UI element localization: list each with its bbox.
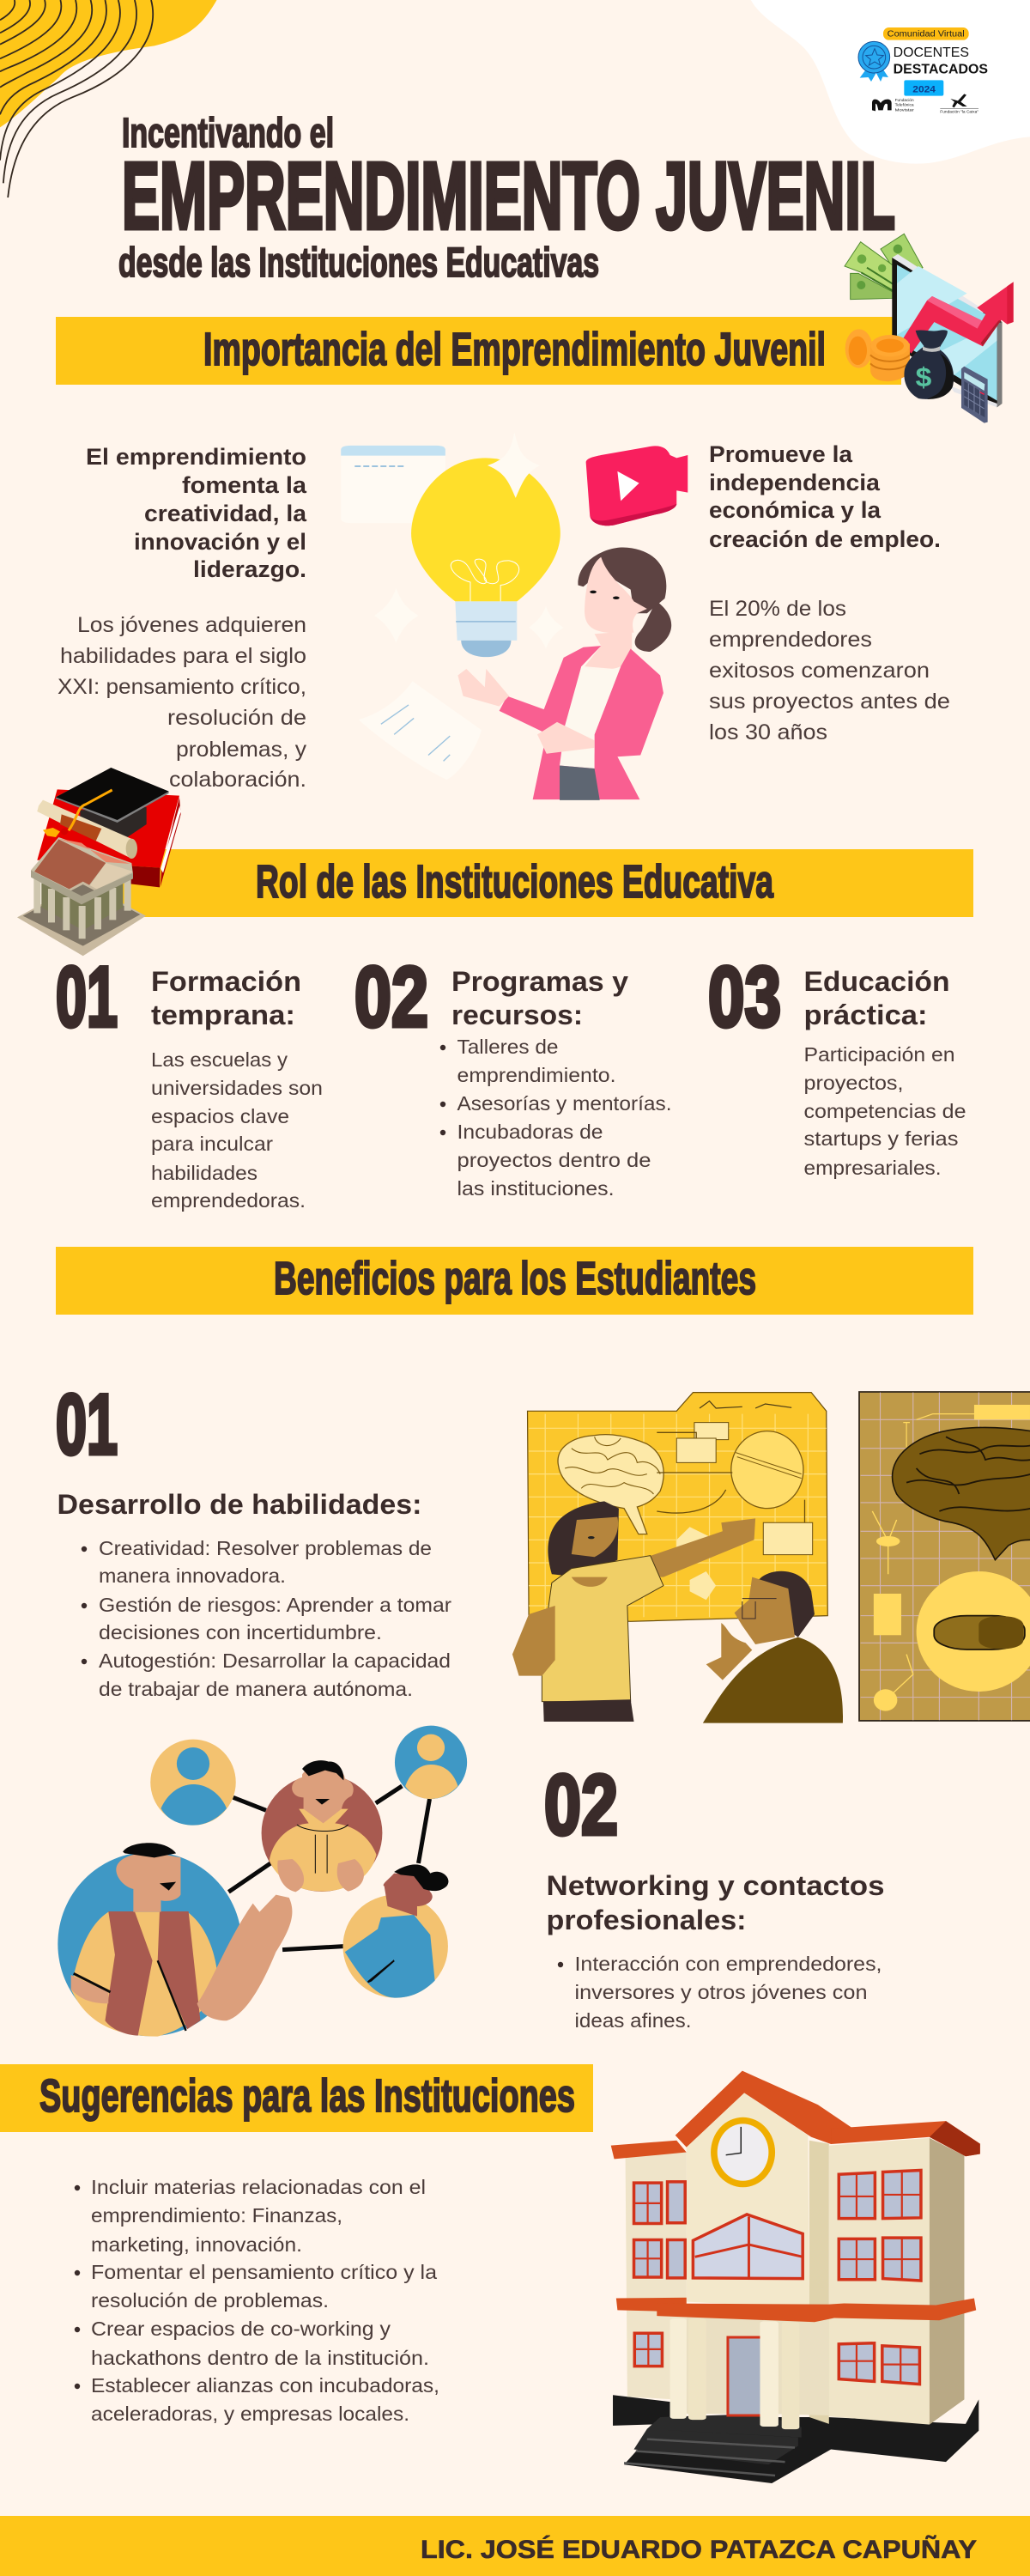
numbered column 01: espacios clave xyxy=(151,1105,289,1127)
suggestions list: Incluir materias relacionadas con el xyxy=(91,2176,426,2198)
panel: importancia left text: fomenta la xyxy=(182,472,307,498)
numbered column 01: emprendedoras. xyxy=(151,1189,306,1212)
suggestions list: Crear espacios de co-working y xyxy=(91,2318,391,2340)
suggestions list: resolución de problemas. xyxy=(91,2289,329,2312)
panel: importancia left text: resolución de xyxy=(167,706,306,730)
numbered column 01: universidades son xyxy=(151,1077,323,1099)
illustration: people at yellow board with brain and pill xyxy=(512,1392,1030,1723)
benefit 01 text: Gestión de riesgos: Aprender a tomar xyxy=(99,1594,451,1616)
section bar: Rol: Rol de las Instituciones Educativa xyxy=(256,856,774,908)
decorative blob: yellow top left with wavy lines xyxy=(0,0,217,197)
panel: importancia left text: problemas, y xyxy=(176,738,307,762)
panel: importancia left text: innovación y el xyxy=(134,529,306,555)
numbered column 03: práctica: xyxy=(803,999,927,1030)
icon: money, chart screen, coins, bag, calculator: $ xyxy=(916,361,932,392)
benefit 02 text: Networking y contactos xyxy=(546,1870,884,1901)
suggestions list: emprendimiento: Finanzas, xyxy=(91,2204,342,2227)
benefit 01 text: Creatividad: Resolver problemas de xyxy=(99,1537,432,1559)
badge: Docentes Destacados 2024: Fundación xyxy=(895,98,914,102)
section bar: Importancia xyxy=(56,317,901,385)
numbered column 03: 03 xyxy=(708,949,781,1044)
badge: Docentes Destacados 2024: 2024 xyxy=(912,84,936,94)
benefit 01 text: Autogestión: Desarrollar la capacidad xyxy=(99,1649,451,1672)
numbered column 02: Incubadoras de xyxy=(457,1121,603,1143)
benefit 01 text: manera innovadora. xyxy=(99,1564,286,1587)
panel: importancia left text xyxy=(58,444,307,792)
panel: importancia left text: liderazgo. xyxy=(193,556,306,582)
benefit 01 text xyxy=(56,1376,451,1700)
numbered column 03: competencias de xyxy=(803,1100,966,1122)
numbered column 01: temprana: xyxy=(151,999,295,1030)
section bar: Rol xyxy=(120,849,973,917)
panel: importancia right text: los 30 años xyxy=(709,720,827,744)
icon: graduation cap, book and temple xyxy=(17,768,181,956)
numbered column 01: 01 xyxy=(56,949,118,1044)
benefit 02 text: inversores y otros jóvenes con xyxy=(575,1981,867,2003)
suggestions list: hackathons dentro de la institución. xyxy=(91,2347,429,2369)
badge: Docentes Destacados 2024: Telefónica xyxy=(895,103,914,107)
panel: importancia right text: Promueve la xyxy=(709,441,853,467)
panel: importancia left text: XXI: pensamiento crítico, xyxy=(58,675,306,699)
suggestions list: aceleradoras, y empresas locales. xyxy=(91,2403,409,2425)
panel: importancia right text: exitosos comenzaron xyxy=(709,659,930,683)
icon: money, chart screen, coins, bag, calculator xyxy=(845,234,1014,423)
numbered column 03 xyxy=(708,949,966,1179)
badge: Docentes Destacados 2024: Comunidad Virtual xyxy=(888,30,965,39)
badge: Docentes Destacados 2024: Movistar xyxy=(895,108,914,112)
footer bar with author: LIC. JOSÉ EDUARDO PATAZCA CAPUÑAY xyxy=(421,2535,977,2564)
numbered column 02: Asesorías y mentorías. xyxy=(457,1092,671,1115)
numbered column 03: empresariales. xyxy=(803,1157,941,1179)
panel: importancia right text: emprendedores xyxy=(709,628,872,652)
illustration: school building xyxy=(611,2071,980,2483)
numbered column 02: emprendimiento. xyxy=(457,1064,616,1086)
suggestions list: Fomentar el pensamiento crítico y la xyxy=(91,2261,438,2283)
benefit 01 text: 01 xyxy=(56,1376,118,1472)
numbered column 01 xyxy=(56,949,323,1212)
title: Incentivando el xyxy=(122,111,334,156)
suggestions list: marketing, innovación. xyxy=(91,2233,302,2256)
numbered column 01: Formación xyxy=(151,966,301,997)
badge: Docentes Destacados 2024: DESTACADOS xyxy=(894,63,988,77)
panel: importancia left text: habilidades para el siglo xyxy=(60,644,306,668)
numbered column 02: Talleres de xyxy=(457,1036,558,1058)
benefit 02 text: 02 xyxy=(544,1757,618,1852)
panel: importancia left text: El emprendimiento xyxy=(86,444,306,470)
white blob top right xyxy=(751,0,1030,164)
panel: importancia left text: creatividad, la xyxy=(144,501,307,526)
panel: importancia right text: creación de empleo. xyxy=(709,526,941,552)
numbered column 02: 02 xyxy=(354,949,428,1044)
numbered column 02 xyxy=(354,949,671,1200)
numbered column 02: las instituciones. xyxy=(457,1177,615,1200)
benefit 02 text: profesionales: xyxy=(546,1905,747,1935)
numbered column 03: Participación en xyxy=(803,1043,954,1066)
numbered column 01: para inculcar xyxy=(151,1133,273,1155)
badge: Docentes Destacados 2024: DOCENTES xyxy=(894,46,969,60)
badge: Docentes Destacados 2024 xyxy=(858,27,988,114)
section bar: Sugerencias: Sugerencias para las Instituciones xyxy=(39,2070,575,2122)
numbered column 03: startups y ferias xyxy=(803,1127,958,1150)
panel: importancia right text: El 20% de los xyxy=(709,597,846,621)
panel: importancia left text: Los jóvenes adquieren xyxy=(77,613,306,637)
benefit 01 text: de trabajar de manera autónoma. xyxy=(99,1678,413,1700)
title xyxy=(118,111,895,286)
panel: importancia right text: sus proyectos antes de xyxy=(709,690,950,714)
numbered column 03: proyectos, xyxy=(803,1072,903,1094)
benefit 02 text: ideas afines. xyxy=(575,2009,692,2032)
numbered column 02: Programas y xyxy=(451,966,628,997)
panel: importancia left text: colaboración. xyxy=(169,768,306,792)
benefit 02 text xyxy=(544,1757,884,2032)
section bar: Beneficios: Beneficios para los Estudiantes xyxy=(274,1253,756,1304)
panel: importancia right text xyxy=(709,441,950,744)
illustration: professional network of people xyxy=(58,1726,467,2037)
badge: Docentes Destacados 2024: Fundación "la Caixa" xyxy=(940,110,978,114)
numbered column 02: proyectos dentro de xyxy=(457,1149,651,1171)
numbered column 03: Educación xyxy=(803,966,949,997)
panel: importancia right text: independencia xyxy=(709,470,881,495)
numbered column 01: habilidades xyxy=(151,1162,258,1184)
benefit 01 text: Desarrollo de habilidades: xyxy=(57,1489,422,1520)
illustration: woman with lightbulb xyxy=(341,432,688,800)
title: desde las Instituciones Educativas xyxy=(118,240,599,286)
suggestions list: Establecer alianzas con incubadoras, xyxy=(91,2374,439,2397)
numbered column 02: recursos: xyxy=(451,999,583,1030)
suggestions list xyxy=(75,2176,439,2425)
section bar: Sugerencias xyxy=(0,2064,593,2132)
numbered column 01: Las escuelas y xyxy=(151,1048,288,1071)
section bar: Beneficios xyxy=(56,1247,973,1315)
footer bar with author xyxy=(0,2516,1030,2576)
panel: importancia right text: económica y la xyxy=(709,497,882,523)
benefit 02 text: Interacción con emprendedores, xyxy=(575,1953,882,1975)
benefit 01 text: decisiones con incertidumbre. xyxy=(99,1621,382,1643)
